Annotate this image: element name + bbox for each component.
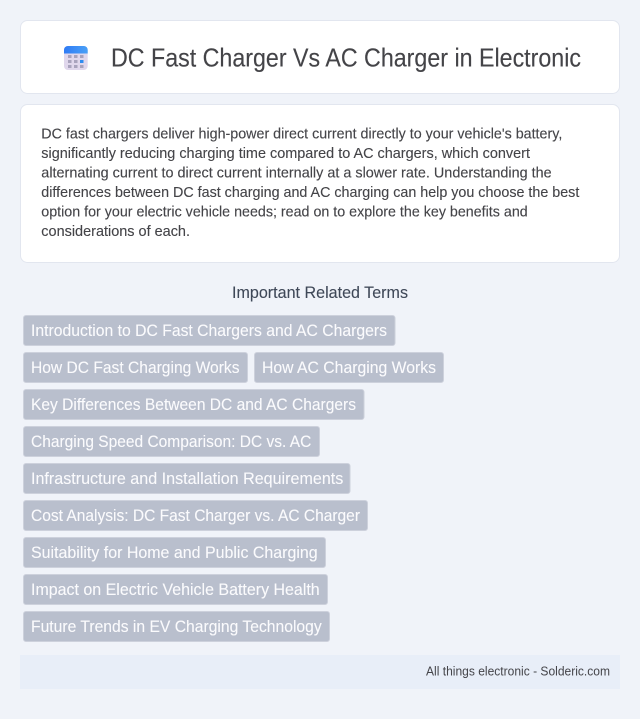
text block: introduction: significantly reducing charging time compared to AC chargers, which convert xyxy=(41,146,530,162)
tag: how DC works: How DC Fast Charging Works xyxy=(31,359,240,377)
tag: key differences xyxy=(24,390,364,420)
text block: introduction: differences between DC fast charging and AC charging can help you choose the best xyxy=(41,185,579,201)
text block: introduction: option for your electric vehicle needs; read on to explore the key benefits and xyxy=(41,204,528,220)
tag: cost analysis xyxy=(24,500,368,530)
heading: important related terms: Important Related Terms xyxy=(232,284,408,302)
tag: key differences: Key Differences Between DC and AC Chargers xyxy=(31,396,356,414)
tag: how DC works xyxy=(24,352,248,382)
title: DC Fast Charger Vs AC Charger in Electronic xyxy=(111,42,581,72)
text block: introduction: alternating current to direct current internally at a slower rate. Understanding the xyxy=(41,166,552,182)
tag: introduction xyxy=(24,316,395,346)
tag: infrastructure xyxy=(24,464,350,494)
panel: title header xyxy=(20,20,620,94)
footer credit: All things electronic - Solderic.com xyxy=(426,665,610,679)
tag: cost analysis: Cost Analysis: DC Fast Charger vs. AC Charger xyxy=(31,507,360,525)
text block: introduction: DC fast chargers deliver high-power direct current directly to your vehicle's battery, xyxy=(41,127,562,143)
tag: introduction: Introduction to DC Fast Chargers and AC Chargers xyxy=(31,322,387,340)
tag: suitability xyxy=(24,538,326,568)
tag: how AC works xyxy=(254,352,444,382)
tag: infrastructure: Infrastructure and Installation Requirements xyxy=(31,470,343,488)
tag: charging speed: Charging Speed Comparison: DC vs. AC xyxy=(31,433,311,451)
tag: suitability: Suitability for Home and Public Charging xyxy=(31,544,318,562)
tag: battery health xyxy=(24,574,328,604)
footer xyxy=(20,655,620,689)
tag: future trends: Future Trends in EV Charging Technology xyxy=(31,618,322,636)
text block: introduction: considerations of each. xyxy=(41,224,190,240)
text block: introduction xyxy=(41,127,579,240)
tag: charging speed xyxy=(24,426,320,456)
tag: how AC works: How AC Charging Works xyxy=(262,359,436,377)
tag: battery health: Impact on Electric Vehicle Battery Health xyxy=(31,581,320,599)
tag: future trends xyxy=(24,612,330,642)
tag list: related terms xyxy=(24,316,444,642)
icon: calendar xyxy=(64,46,88,70)
panel: introduction text xyxy=(20,104,620,262)
